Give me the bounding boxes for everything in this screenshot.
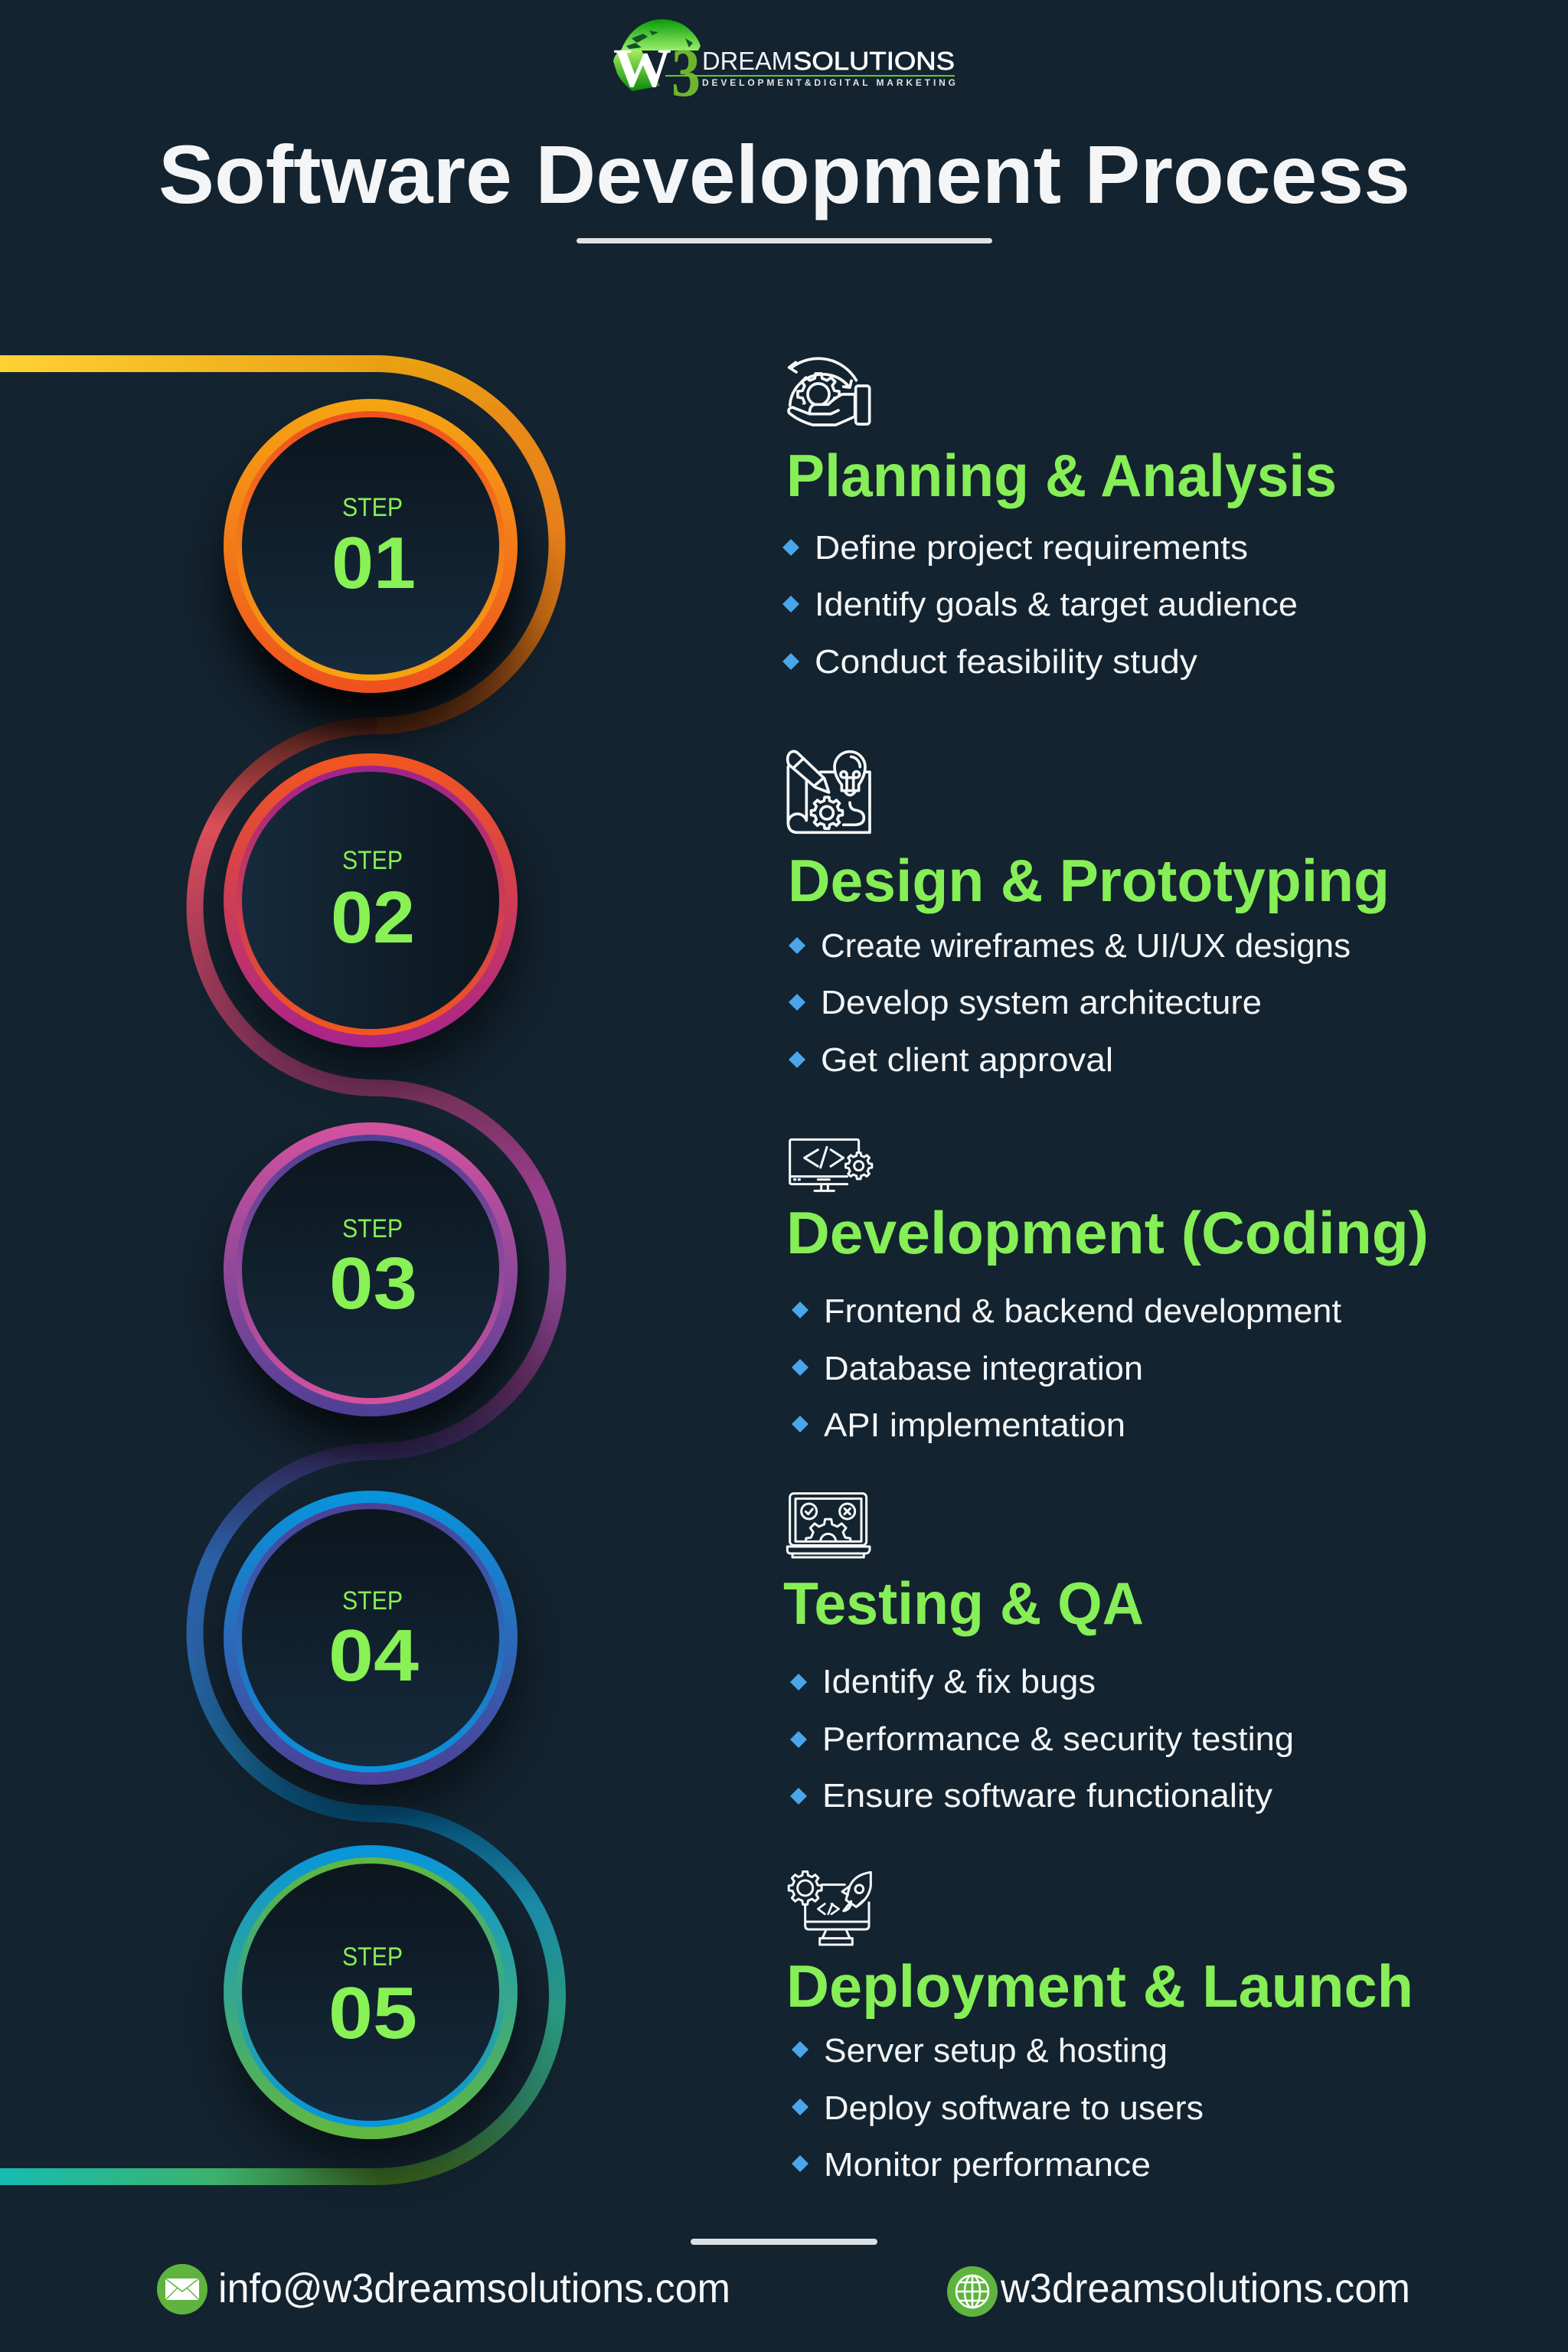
heading: deployment: Deployment & Launch bbox=[786, 1952, 1413, 2020]
heading: design: Design & Prototyping bbox=[788, 847, 1390, 914]
ring 02 bbox=[224, 753, 518, 1047]
bullet list: design bbox=[789, 927, 1351, 1079]
icon: laptop with check, cross, gear bbox=[787, 1494, 870, 1563]
ring 05 bbox=[224, 1845, 518, 2139]
step 03 bbox=[224, 1122, 518, 1444]
shadow 02 bbox=[233, 786, 518, 1070]
step 02 bbox=[224, 753, 518, 1070]
bullet list: development: API implementation bbox=[824, 1406, 1125, 1444]
step 05 bbox=[224, 1845, 518, 2164]
icon: hand with gear bbox=[789, 358, 870, 425]
bullet list: design: Develop system architecture bbox=[821, 984, 1262, 1021]
bullet list: planning: Conduct feasibility study bbox=[815, 643, 1197, 681]
number 02: 02 bbox=[331, 877, 415, 959]
label step 01: STEP bbox=[342, 493, 403, 522]
panel: testing bbox=[783, 1494, 1294, 1815]
icon: monitor with code and gear bbox=[790, 1139, 872, 1191]
logo W3 mark bbox=[613, 35, 701, 111]
ring 03 bbox=[224, 1122, 518, 1416]
flowing line connecting the steps bbox=[0, 364, 557, 2177]
bullet list: testing bbox=[790, 1663, 1294, 1815]
bullet list: deployment bbox=[792, 2032, 1204, 2184]
bullet list: planning bbox=[782, 529, 1298, 681]
shadow 05 bbox=[231, 1879, 516, 2164]
ring 01 bbox=[224, 399, 518, 693]
panel: design & prototyping bbox=[788, 751, 1390, 1079]
panel: planning & analysis bbox=[782, 358, 1337, 681]
step 01 bbox=[224, 399, 518, 726]
step 04 bbox=[224, 1491, 518, 1808]
bullet list: testing: Identify & fix bugs bbox=[822, 1663, 1096, 1700]
icon: globe bbox=[947, 2266, 998, 2317]
label step 03: STEP bbox=[342, 1214, 403, 1243]
bullet list: deployment: Server setup & hosting bbox=[824, 2032, 1168, 2069]
email address: info@w3dreamsolutions.com bbox=[218, 2265, 730, 2311]
bullet list: testing: Performance & security testing bbox=[822, 1720, 1294, 1758]
logo wordmark bbox=[702, 47, 955, 75]
logo W3 mark: W bbox=[613, 38, 671, 99]
bullet list: deployment: Monitor performance bbox=[824, 2146, 1151, 2184]
title: Software Development Process bbox=[158, 128, 1410, 220]
bullet list: development: Database integration bbox=[824, 1350, 1143, 1387]
logo green rule bbox=[665, 75, 955, 77]
icon: envelope bbox=[157, 2264, 207, 2314]
label step 05: STEP bbox=[342, 1942, 403, 1971]
icon: blueprint, pencil, bulb bbox=[788, 751, 870, 832]
number 05: 05 bbox=[328, 1972, 417, 2054]
logo wordmark: SOLUTIONS bbox=[793, 47, 955, 75]
logo bbox=[613, 19, 956, 111]
bullet list: deployment: Deploy software to users bbox=[824, 2089, 1204, 2127]
footer: email bbox=[157, 2264, 730, 2314]
bullet list: development bbox=[792, 1292, 1341, 1444]
icon: monitor, gear and rocket bbox=[789, 1872, 871, 1945]
panel: deployment bbox=[786, 1872, 1413, 2184]
logo tagline: DEVELOPMENT&DIGITAL MARKETING bbox=[702, 77, 956, 88]
number 01: 01 bbox=[332, 522, 416, 604]
heading: development: Development (Coding) bbox=[786, 1199, 1429, 1266]
logo W3 mark: 3 bbox=[671, 35, 701, 111]
shadow 04 bbox=[231, 1523, 516, 1808]
number 03: 03 bbox=[329, 1243, 417, 1325]
bullet list: planning: Identify goals & target audience bbox=[815, 586, 1298, 623]
panel: development bbox=[786, 1139, 1429, 1444]
logo globe bbox=[613, 19, 701, 91]
shadow 03 bbox=[231, 1159, 516, 1444]
footer: website bbox=[947, 2265, 1410, 2317]
label step 04: STEP bbox=[342, 1586, 403, 1615]
heading: testing: Testing & QA bbox=[783, 1570, 1144, 1637]
heading: planning: Planning & Analysis bbox=[786, 442, 1337, 509]
shadow 01 bbox=[231, 441, 516, 726]
footer divider bbox=[691, 2239, 877, 2245]
bullet list: design: Get client approval bbox=[821, 1041, 1113, 1079]
website address: w3dreamsolutions.com bbox=[1000, 2265, 1410, 2311]
bullet list: development: Frontend & backend development bbox=[824, 1292, 1341, 1330]
label step 02: STEP bbox=[342, 846, 403, 875]
ring 04 bbox=[224, 1491, 518, 1785]
logo wordmark: DREAM bbox=[702, 47, 792, 75]
number 04: 04 bbox=[328, 1615, 419, 1697]
title underline bbox=[577, 238, 992, 243]
bullet list: design: Create wireframes & UI/UX designs bbox=[821, 927, 1351, 965]
bullet list: testing: Ensure software functionality bbox=[822, 1777, 1272, 1815]
bullet list: planning: Define project requirements bbox=[815, 529, 1248, 567]
